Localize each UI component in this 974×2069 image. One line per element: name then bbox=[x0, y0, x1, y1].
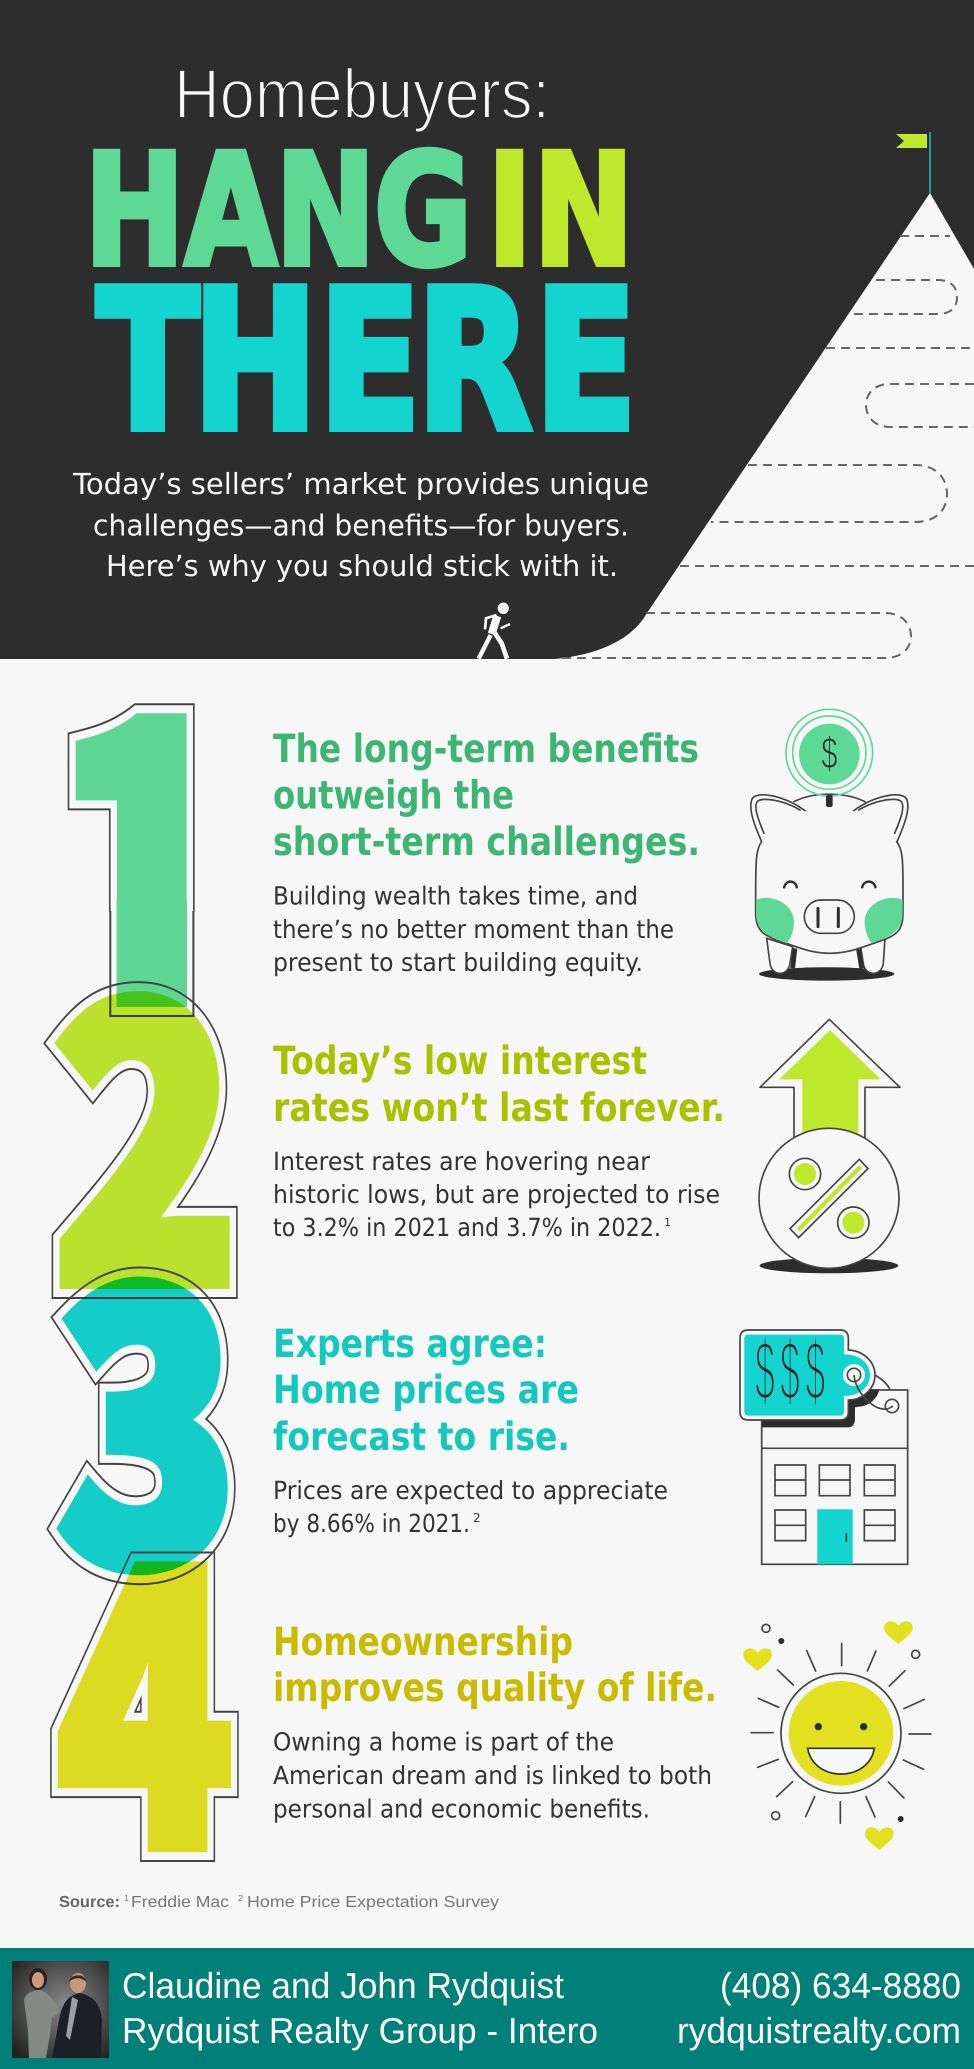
numeral 4: 4 bbox=[58, 1406, 232, 1953]
numeral 3: 3 bbox=[57, 1128, 238, 1671]
mountain bbox=[540, 193, 974, 660]
title: there: THERE bbox=[97, 249, 637, 474]
title: hang in: HANG bbox=[85, 122, 472, 301]
body 4: personal and economic benefits. bbox=[273, 1794, 650, 1824]
panel: reason 1 bbox=[273, 709, 908, 981]
panel: reason 4 bbox=[273, 1620, 931, 1850]
intro text bbox=[72, 467, 649, 583]
agent names: Claudine and John Rydquist bbox=[122, 1965, 564, 2006]
body 3: Prices are expected to appreciate bbox=[273, 1476, 668, 1505]
intro text: Here’s why you should stick with it. bbox=[106, 549, 618, 583]
body 3: by 8.66% in 2021. bbox=[273, 1509, 470, 1538]
heading 1: outweigh the bbox=[273, 774, 514, 818]
source note: Source: bbox=[59, 1894, 120, 1911]
heading 3 bbox=[273, 1322, 579, 1460]
heading 4: Homeownership bbox=[273, 1620, 573, 1665]
title: hang in: IN bbox=[487, 122, 634, 301]
heading 4: improves quality of life. bbox=[273, 1666, 717, 1711]
numeral 2 bbox=[43, 981, 238, 1299]
panel: footer bbox=[0, 1948, 974, 2069]
heading 4 bbox=[273, 1620, 717, 1711]
icon: piggy bank with coin: $ bbox=[821, 728, 837, 778]
panel: header bbox=[0, 0, 974, 660]
numeral 3 bbox=[46, 1266, 236, 1586]
numeral 1: 1 bbox=[54, 560, 237, 1106]
panel: reason 2 bbox=[273, 1019, 900, 1273]
heading 2 bbox=[273, 1039, 725, 1131]
body 1: present to start building equity. bbox=[273, 948, 643, 977]
contact details: (408) 634-8880 bbox=[720, 1965, 961, 2006]
agent photo bbox=[12, 1961, 109, 2058]
icon: price tag and house bbox=[740, 1323, 908, 1564]
flag bbox=[896, 132, 930, 193]
heading 3: Experts agree: bbox=[273, 1322, 547, 1367]
numeral 4 bbox=[50, 1552, 239, 1862]
panel: numerals bbox=[43, 703, 239, 1862]
contact details bbox=[677, 1965, 961, 2051]
intro text: Today’s sellers’ market provides unique bbox=[72, 467, 649, 501]
body 1 bbox=[273, 882, 674, 977]
heading 2: rates won’t last forever. bbox=[273, 1086, 725, 1131]
agent names: Rydquist Realty Group - Intero bbox=[122, 2010, 598, 2051]
numeral 2: 2 bbox=[53, 839, 239, 1391]
body 4: Owning a home is part of the bbox=[273, 1728, 614, 1756]
source note: Freddie Mac bbox=[131, 1894, 229, 1911]
icon: walking person bbox=[479, 603, 510, 659]
source note bbox=[59, 1893, 499, 1911]
body 1: there’s no better moment than the bbox=[273, 915, 674, 944]
icon: smiling sun with hearts bbox=[743, 1621, 931, 1850]
heading 1: The long-term benefits bbox=[273, 727, 699, 772]
body 4: American dream and is linked to both bbox=[273, 1761, 712, 1790]
title kicker: Homebuyers: bbox=[174, 55, 550, 133]
agent names bbox=[122, 1965, 598, 2051]
body 2 bbox=[273, 1147, 720, 1242]
icon: arrow and percent bbox=[759, 1019, 900, 1273]
body 1: Building wealth takes time, and bbox=[273, 882, 638, 911]
heading 2: Today’s low interest bbox=[273, 1039, 647, 1084]
body 4 bbox=[273, 1728, 712, 1824]
body 2: 1 bbox=[664, 1216, 671, 1229]
body 2: to 3.2% in 2021 and 3.7% in 2022. bbox=[273, 1213, 661, 1242]
icon: piggy bank with coin bbox=[751, 709, 908, 981]
body 3 bbox=[273, 1476, 668, 1538]
heading 1 bbox=[273, 727, 700, 865]
contact details: rydquistrealty.com bbox=[677, 2010, 961, 2051]
panel: reason 3 bbox=[273, 1322, 908, 1564]
heading 1: short-term challenges. bbox=[273, 820, 700, 865]
heading 3: forecast to rise. bbox=[273, 1415, 570, 1460]
body 2: historic lows, but are projected to rise bbox=[273, 1180, 720, 1209]
source note: 1 bbox=[124, 1893, 129, 1903]
heading 3: Home prices are bbox=[273, 1368, 579, 1413]
body 2: Interest rates are hovering near bbox=[273, 1147, 651, 1176]
source note: 2 bbox=[238, 1893, 243, 1903]
body 3: 2 bbox=[473, 1511, 481, 1525]
icon: price tag and house: $$$ bbox=[755, 1323, 825, 1418]
intro text: challenges—and benefits—for buyers. bbox=[93, 508, 629, 542]
source note: Home Price Expectation Survey bbox=[247, 1894, 499, 1911]
numeral 1 bbox=[68, 703, 195, 1017]
dashed climbing trail bbox=[559, 236, 974, 658]
